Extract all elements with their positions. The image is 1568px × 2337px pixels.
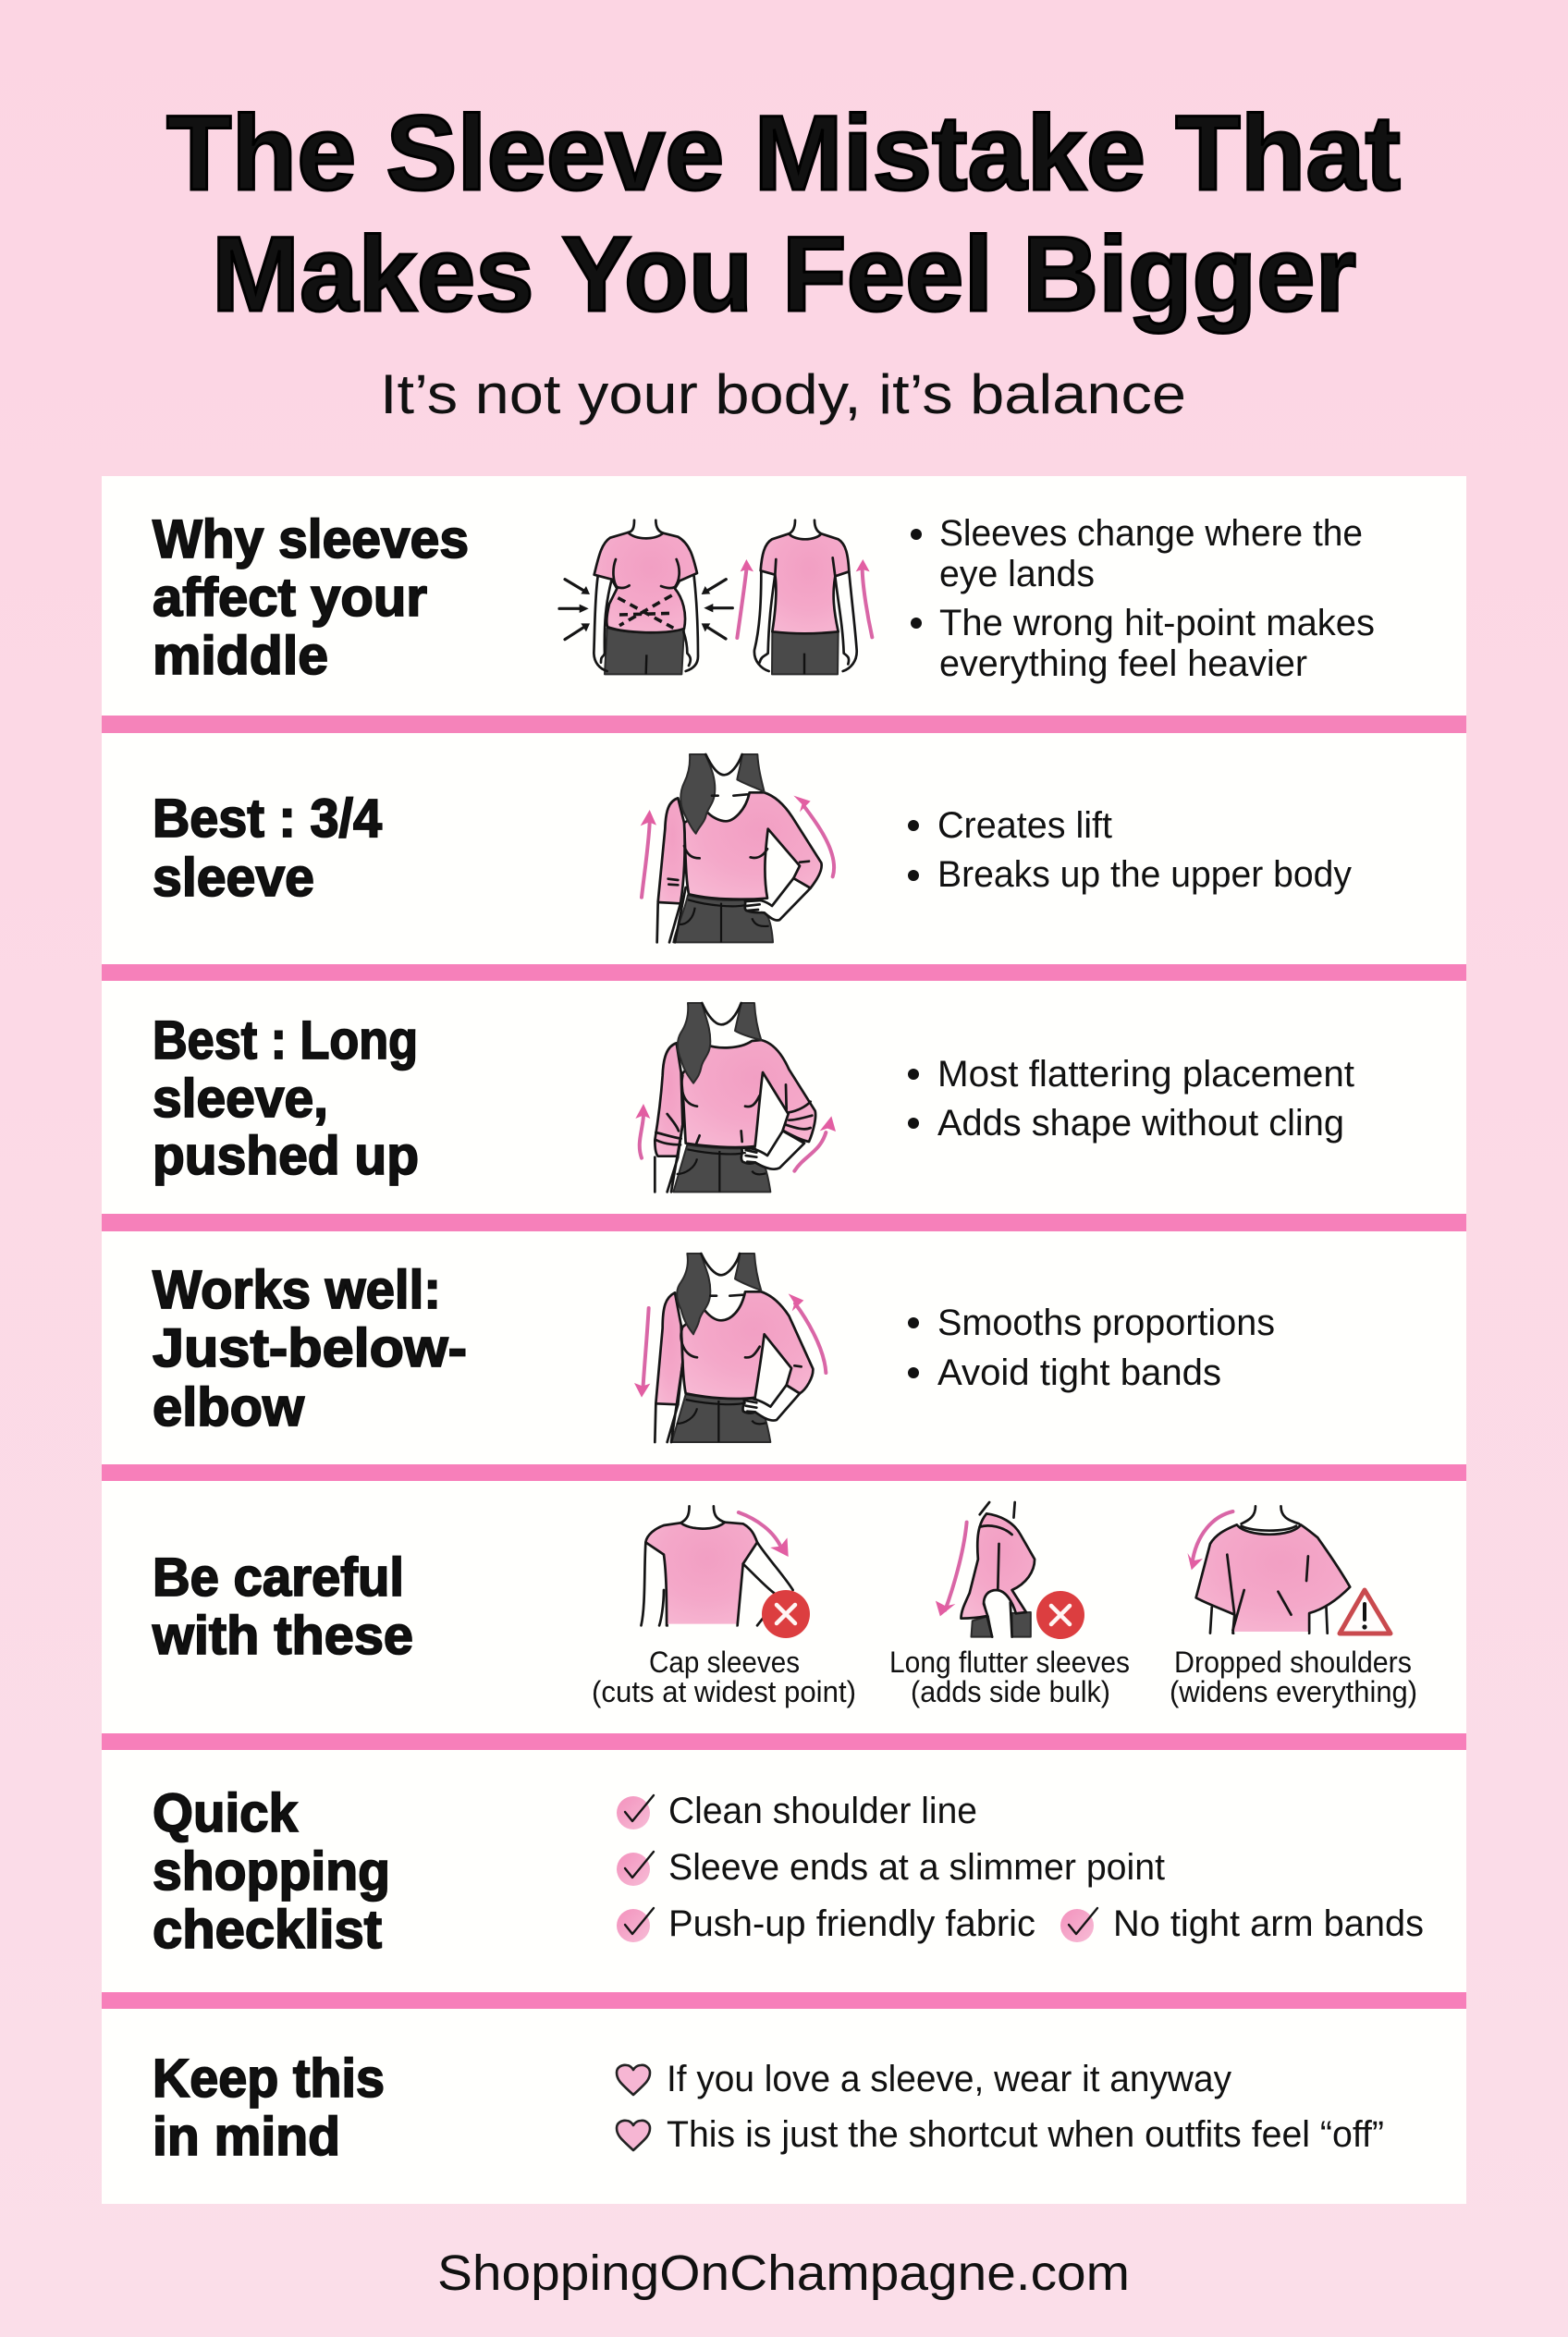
bullet list [908,805,1352,895]
heading: checklist [153,1900,382,1960]
title: Makes You Feel Bigger [212,215,1356,334]
heading: Quick [153,1783,299,1843]
bullet list: eye lands [939,554,1095,594]
heading [153,2049,385,2167]
heading [153,1010,419,1186]
caption: (adds side bulk) [911,1675,1110,1708]
heading: shopping [153,1841,390,1902]
check item: push-up friendly fabric: Push-up friendly fabric [668,1903,1035,1944]
panel: why sleeves affect your middle [102,476,1466,716]
heading: affect your [153,568,427,628]
illustration: dropped shoulder top [1187,1506,1350,1633]
panel: keep this in mind [102,2009,1466,2204]
panel: best long sleeve pushed up [102,981,1466,1214]
heading: Be careful [153,1548,404,1608]
heading [153,789,382,908]
heading [153,509,469,686]
illustration: woman in 3/4 sleeve top [641,754,834,942]
bullet list: Most flattering placement [937,1054,1354,1095]
illustration: woman in pushed-up long sleeve top [635,1003,836,1192]
heart item: shortcut: This is just the shortcut when outfits feel “off” [667,2114,1384,2155]
heading: Best : 3/4 [153,789,382,849]
item: cap sleeves [592,1506,856,1708]
heading [153,1260,467,1438]
subtitle: It’s not your body, it’s balance [380,363,1186,425]
icon: red x [1036,1591,1084,1639]
heading: middle [153,626,328,686]
heading: Works well: [153,1260,441,1320]
bullet list: everything feel heavier [939,643,1307,684]
icon: warning triangle [1340,1590,1390,1633]
caption: Dropped shoulders [1174,1646,1412,1679]
illustration: woman in just-below-elbow sleeve top [634,1254,826,1442]
caption: (widens everything) [1170,1675,1417,1708]
item: long flutter sleeves [889,1502,1130,1708]
bullet list: Sleeves change where the [939,513,1363,554]
bullet list: Breaks up the upper body [937,854,1352,895]
heading: with these [152,1606,413,1666]
footer website: ShoppingOnChampagne.com [437,2245,1130,2301]
illustration: fitted vs loose tee figures [559,520,872,674]
caption [1170,1646,1417,1708]
bullet list [911,513,1375,684]
heading: pushed up [153,1126,419,1186]
title [166,94,1401,334]
caption [889,1646,1130,1708]
heading [153,1783,390,1960]
check item: clean shoulder line: Clean shoulder line [668,1791,977,1831]
bullet list [908,1303,1275,1393]
item: dropped shoulders [1170,1506,1417,1708]
caption: Cap sleeves [649,1646,800,1679]
bullet list: Avoid tight bands [937,1352,1221,1393]
heading: sleeve, [153,1069,328,1129]
caption [592,1646,856,1708]
bullet list: The wrong hit-point makes [939,603,1375,643]
panel: best 3/4 sleeve [102,733,1466,964]
bullet list: Smooths proportions [937,1303,1275,1343]
icon: red x [762,1590,810,1638]
check item: no tight arm bands: No tight arm bands [1113,1903,1424,1944]
heading: elbow [153,1377,305,1438]
heading: Just-below- [153,1318,467,1378]
heading: Why sleeves [153,509,469,569]
panel: be careful with these [102,1481,1466,1733]
check item: sleeve ends at a slimmer point: Sleeve ends at a slimmer point [668,1847,1165,1888]
heading: Keep this [153,2049,385,2109]
illustration: cap sleeve top [641,1506,793,1625]
heart item: love a sleeve: If you love a sleeve, wear it anyway [667,2059,1231,2099]
bullet list: Creates lift [937,805,1112,846]
caption: (cuts at widest point) [592,1675,856,1708]
bullet list: Adds shape without cling [937,1103,1344,1144]
panel: quick shopping checklist [102,1750,1466,1992]
title: The Sleeve Mistake That [166,94,1401,213]
bullet list [908,1054,1354,1144]
heading: sleeve [153,848,314,908]
panel: works well just-below-elbow [102,1231,1466,1464]
caption: Long flutter sleeves [889,1646,1130,1679]
heading [152,1548,413,1666]
illustration: flutter sleeve top [936,1502,1035,1637]
heading: Best : Long [153,1010,418,1071]
heading: in mind [153,2107,340,2167]
